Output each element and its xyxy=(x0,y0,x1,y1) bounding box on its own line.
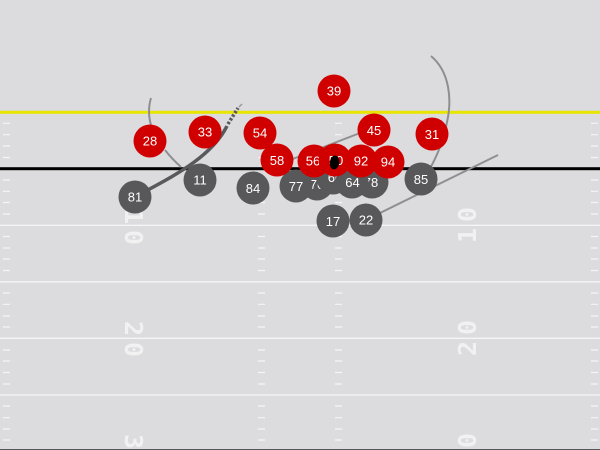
player 33: 33 xyxy=(198,124,212,140)
player 50 xyxy=(318,144,352,176)
player 60 xyxy=(316,162,350,194)
route: 31 xyxy=(428,56,449,172)
player 77: 77 xyxy=(289,179,303,194)
player 81 xyxy=(118,180,152,214)
route: 81 xyxy=(135,104,242,197)
routes xyxy=(149,56,498,214)
player 11: 11 xyxy=(193,172,207,188)
offense players xyxy=(118,162,438,238)
player 58: 58 xyxy=(270,153,284,168)
yard numbers left xyxy=(119,209,148,450)
hash marks xyxy=(3,123,598,440)
player 94 xyxy=(372,146,404,178)
route: 45 xyxy=(290,133,360,160)
player 78 xyxy=(356,166,388,198)
player 33 xyxy=(188,116,222,148)
player 56: 56 xyxy=(306,154,320,168)
player 76 xyxy=(300,168,334,200)
player 92: 92 xyxy=(354,154,368,168)
player 64: 64 xyxy=(345,175,360,190)
player 45: 45 xyxy=(367,123,381,138)
player 81: 81 xyxy=(128,190,142,204)
yard numbers left: 10 xyxy=(119,209,148,251)
football xyxy=(329,155,340,170)
player 17 xyxy=(316,204,350,238)
yard numbers right: 10 xyxy=(453,201,482,243)
player 22: 22 xyxy=(359,212,373,228)
player 28 xyxy=(134,124,166,158)
player 56 xyxy=(298,144,330,178)
player 45 xyxy=(358,114,390,146)
player 17: 17 xyxy=(326,214,340,229)
player 11 xyxy=(184,164,216,196)
player 54 xyxy=(244,116,276,150)
defense players xyxy=(134,74,448,178)
first down line xyxy=(0,111,600,114)
player 50: 50 xyxy=(329,153,343,168)
player 85 xyxy=(404,162,438,196)
player 22 xyxy=(350,204,382,236)
player 77 xyxy=(280,170,312,202)
yard numbers right: 20 xyxy=(453,314,482,356)
route: 28 xyxy=(149,98,181,167)
player 94: 94 xyxy=(381,154,395,170)
player 39 xyxy=(318,74,350,108)
player 39: 39 xyxy=(327,84,341,98)
player 31: 31 xyxy=(425,127,439,142)
yard lines xyxy=(0,225,600,395)
player 76: 76 xyxy=(310,177,324,192)
player 28: 28 xyxy=(143,134,157,148)
player 58 xyxy=(260,144,294,176)
yard numbers left: 20 xyxy=(119,321,148,363)
player 85: 85 xyxy=(414,172,428,187)
player 64 xyxy=(336,166,368,198)
route: 22 xyxy=(378,155,498,214)
player 78: 78 xyxy=(364,175,378,190)
line of scrimmage xyxy=(0,167,600,170)
player 92 xyxy=(344,144,378,178)
player 60: 60 xyxy=(328,170,342,185)
player 84 xyxy=(236,172,270,204)
player 54: 54 xyxy=(253,126,267,140)
player 84: 84 xyxy=(246,181,260,196)
yard numbers right xyxy=(453,201,482,450)
player 31 xyxy=(416,118,448,150)
bottom edge xyxy=(0,449,600,450)
